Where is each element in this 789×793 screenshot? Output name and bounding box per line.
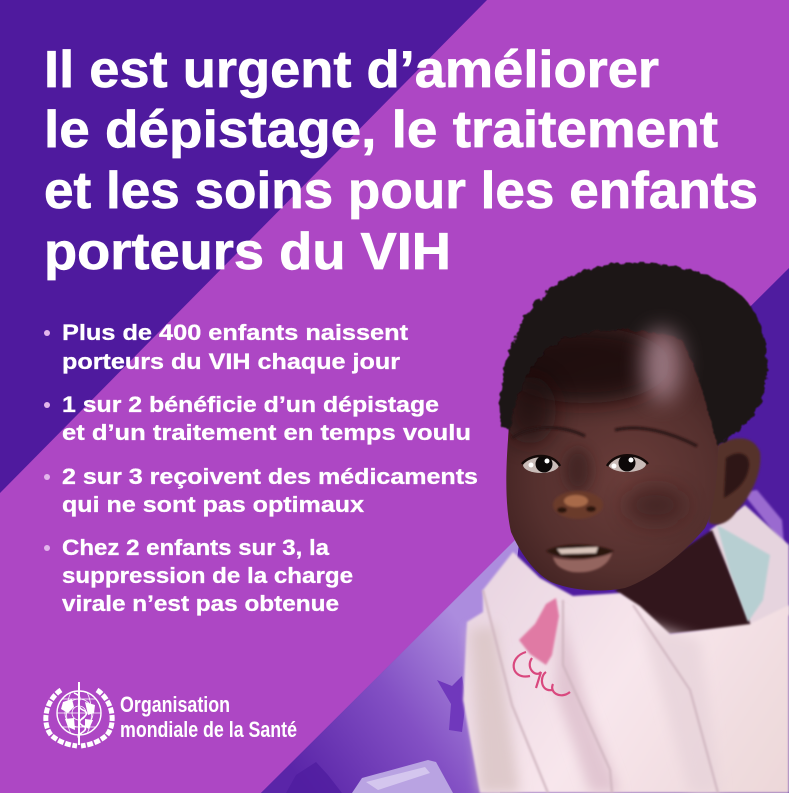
ear <box>708 438 760 525</box>
dark diagonal band, top left <box>0 0 487 493</box>
bullet 2: 1 sur 2 bénéficie d’un dépistage <box>62 392 439 417</box>
organisation name: mondiale de la Santé <box>120 717 297 742</box>
bullet 3 <box>44 464 478 517</box>
collar <box>717 525 770 622</box>
bullet 3: 2 sur 3 reçoivent des médicaments <box>62 464 478 489</box>
nose <box>553 491 603 519</box>
cloth folds <box>483 590 718 793</box>
cloth shadows <box>470 610 720 793</box>
title: le dépistage, le traitement <box>44 101 718 159</box>
icon: WHO emblem <box>46 682 112 746</box>
bullet 1: Plus de 400 enfants naissent <box>62 320 409 345</box>
forehead shadow <box>500 327 670 444</box>
bullet 4: Chez 2 enfants sur 3, la <box>62 535 330 560</box>
bullet 3: qui ne sont pas optimaux <box>62 492 365 517</box>
wrapped cloth <box>463 552 789 793</box>
bullet 1: porteurs du VIH chaque jour <box>62 349 400 374</box>
bullet 4 <box>44 535 353 616</box>
title <box>44 41 758 281</box>
continents <box>61 699 95 730</box>
title: et les soins pour les enfants <box>44 162 758 220</box>
neck <box>615 530 752 634</box>
organisation name: Organisation <box>120 692 230 717</box>
title: porteurs du VIH <box>44 223 451 281</box>
eyebrows <box>512 428 585 438</box>
purple shadow on cloth <box>742 490 784 545</box>
hair <box>500 263 767 445</box>
bullet 2 <box>44 392 471 445</box>
cheek shadows <box>625 487 685 523</box>
bottom-left packaging and flower detail <box>286 760 453 793</box>
icon: flower pattern <box>437 676 466 732</box>
title: Il est urgent d’améliorer <box>44 41 659 99</box>
pink lettering on cloth <box>514 652 570 695</box>
bullet list <box>44 320 478 616</box>
right eye <box>607 454 648 472</box>
logo: WHO <box>46 682 297 746</box>
forehead highlight <box>642 329 682 401</box>
photo: child <box>463 263 789 793</box>
face <box>506 309 718 590</box>
pink butterfly print on cloth <box>519 598 559 665</box>
left eye <box>522 456 560 473</box>
bullet 4: suppression de la charge <box>62 563 353 588</box>
mouth <box>546 545 614 572</box>
bullet 2: et d’un traitement en temps voulu <box>62 420 471 445</box>
light purple fabric behind child <box>261 535 520 793</box>
cloth upper right <box>710 505 789 628</box>
organisation name <box>120 692 297 742</box>
bullet 1 <box>44 320 409 374</box>
bullet 4: virale n’est pas obtenue <box>62 591 339 616</box>
dark diagonal band, bottom right <box>261 268 789 793</box>
